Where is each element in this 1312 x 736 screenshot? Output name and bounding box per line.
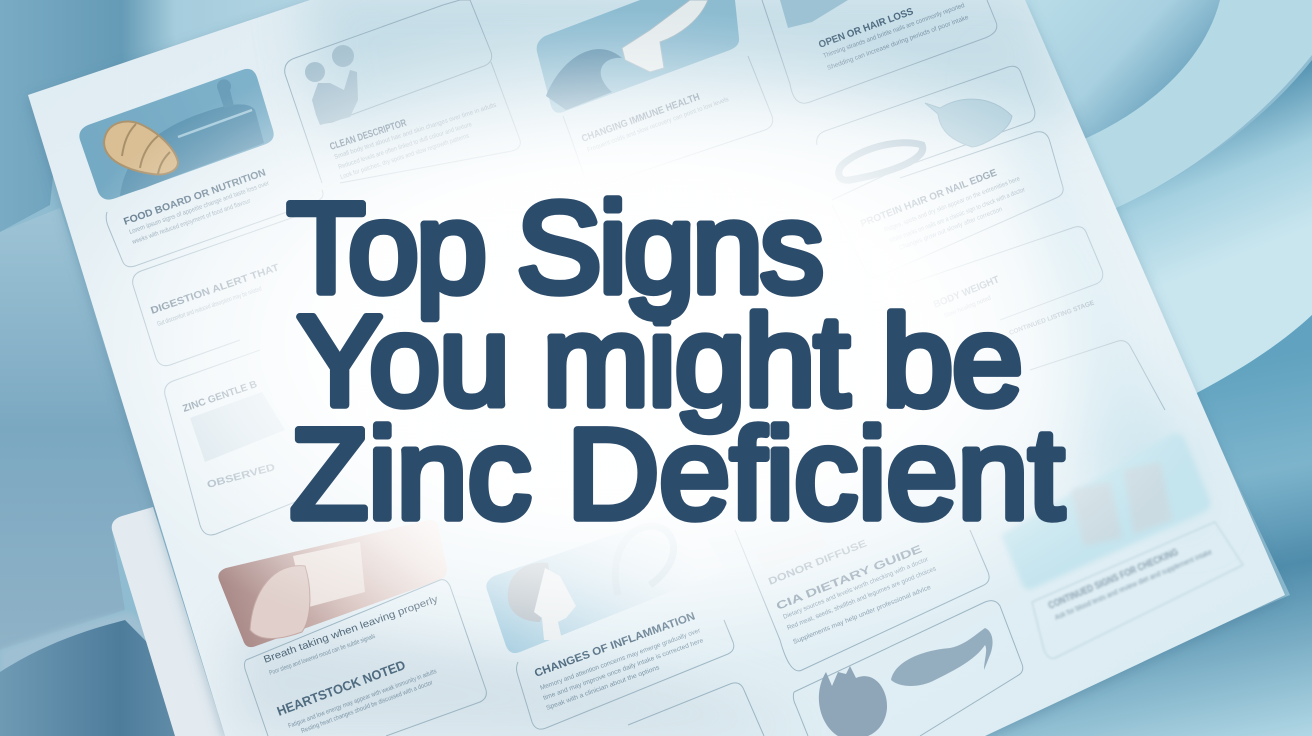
card outline 5 <box>817 66 1035 200</box>
icon: bread <box>104 121 178 174</box>
title line 1: Top Signs <box>287 177 824 320</box>
card below 7 <box>1030 341 1165 410</box>
icon: pillow <box>293 542 365 608</box>
body 10b: Resting heart changes should be discussed with a doctor <box>300 679 434 735</box>
heading 9: CONTINUED SIGNS FOR CHECKING <box>1047 547 1180 612</box>
panel: sign 11 <box>486 508 764 736</box>
card outline 8 <box>165 350 300 535</box>
card 5 lower <box>832 132 1063 277</box>
card outline 4 <box>762 0 997 103</box>
heading 3: CHANGING IMMUNE HEALTH <box>580 92 701 145</box>
person icon <box>305 45 358 125</box>
body 5a: Ridges, spots and dry skin appear on the extremities here <box>883 175 1021 234</box>
body 6: Gut discomfort and reduced absorption may be related <box>156 285 263 328</box>
image 4 <box>780 0 848 28</box>
heading 7: BODY WEIGHT <box>932 274 1001 311</box>
image 9 <box>1001 433 1210 589</box>
image 1 table <box>178 110 252 137</box>
body 1a: Lorem ipsum signs of appetite change and taste loss over <box>128 180 271 236</box>
card outline 11 <box>516 620 734 729</box>
icon: bag <box>925 99 1012 147</box>
back sheet <box>112 507 225 736</box>
card outline 9 <box>1032 522 1243 658</box>
body 1b: weeks with reduced enjoyment of food and flavour <box>131 197 252 246</box>
title <box>287 177 1064 546</box>
image 10 <box>218 520 447 647</box>
card outline 7 <box>905 227 1103 320</box>
heading 1: FOOD BOARD OR NUTRITION <box>122 167 267 228</box>
icon: stethoscope <box>615 526 674 595</box>
panel: sign 9 <box>1001 433 1243 658</box>
image 3 <box>537 0 739 113</box>
subheading 8: OBSERVED <box>206 462 276 491</box>
panel: sign 10 <box>218 520 486 736</box>
panel: sign 3 <box>537 0 773 187</box>
card outline 2 <box>285 0 492 124</box>
body 2b: Reduced levels are often linked to dull colour and texture <box>337 121 473 171</box>
body 11a: Memory and attention concerns may emerge gradually over <box>539 627 702 692</box>
body 10a: Fatigue and low energy may appear with weak immunity in adults <box>287 668 438 730</box>
body 9: Ask for blood tests and review diet and supplement intake <box>1054 549 1213 622</box>
body 2a: Small body text about hair and skin changes over time in adults <box>333 101 498 161</box>
panel: sign 5 <box>817 66 1063 277</box>
icon: apple <box>819 666 887 736</box>
heading 2: CLEAN DESCRIPTOR <box>329 117 409 153</box>
body 2c: Look for patches, dry spots and slow regrowth patterns <box>339 132 471 181</box>
image 8 <box>190 392 285 462</box>
panel: sign 7 <box>905 227 1165 410</box>
title line 3: Zinc Deficient <box>290 403 1064 546</box>
body 5b: White marks on nails are a classic sign to check with a doctor <box>888 186 1027 245</box>
panel: sign 2 <box>285 0 520 183</box>
card outline 12 <box>735 530 989 671</box>
panel: sign 4 <box>762 0 997 103</box>
heading 5: PROTEIN HAIR OR NAIL EDGE <box>859 167 999 230</box>
card lower 12 <box>793 601 1023 736</box>
heading 11: CHANGES OF INFLAMMATION <box>533 610 697 680</box>
central glow <box>100 24 1166 660</box>
body 5c: Changes grow out slowly after correction <box>898 206 1004 252</box>
body 3: Frequent colds and slow recovery can point to low levels <box>586 96 730 154</box>
panel: sign 8 <box>165 350 300 535</box>
icon: clip <box>839 143 923 180</box>
body 12a: Dietary sources and levels worth checking with a doctor <box>782 556 930 621</box>
title line 2: You might be <box>297 290 1023 433</box>
heading 10: Breath taking when leaving properly <box>262 594 439 666</box>
heading 6: DIGESTION ALERT THAT <box>149 262 281 317</box>
body 11c: Speak with a clinician about the options <box>545 664 661 712</box>
body 7: Slow healing noted <box>943 295 992 320</box>
card 2 lower <box>285 62 520 183</box>
card below 11 <box>628 683 764 736</box>
panel: sign 1 <box>79 69 323 267</box>
heading 8: ZINC GENTLE B <box>181 379 259 415</box>
card outline 10 <box>244 580 486 736</box>
subheading 12: CIA DIETARY GUIDE <box>775 543 924 613</box>
card outline 3 <box>563 56 773 187</box>
icon: profile hair <box>508 563 552 622</box>
image 1 figure <box>217 79 234 108</box>
panel: sign 6 <box>133 215 300 366</box>
card outline 1 <box>106 190 323 267</box>
image 11 <box>486 508 725 653</box>
panel: sign 12 <box>735 530 1023 736</box>
icon: wave <box>546 49 622 110</box>
body 12b: Red meat, seeds, shellfish and legumes are good choices <box>786 565 938 632</box>
icon: hand <box>622 0 708 72</box>
body 11b: time and may improve once daily intake is corrected here <box>542 637 705 702</box>
sheet tint <box>230 0 1200 736</box>
image 9 shapes <box>1071 462 1172 546</box>
card outline 6 <box>133 215 300 366</box>
icon: profile face <box>534 568 576 640</box>
body 12c: Supplements may help under professional advice <box>792 584 932 646</box>
icon: sleeping head <box>250 566 310 638</box>
image 1 dome <box>120 104 264 196</box>
body 4b: Shedding can increase during periods of poor intake <box>826 14 970 72</box>
heading 10b: HEARTSTOCK NOTED <box>275 657 407 719</box>
subheading 10: Poor sleep and lowered mood can be subtle signals <box>268 633 377 677</box>
image 1 <box>79 69 274 200</box>
image 12 <box>755 530 826 570</box>
heading 4: OPEN OR HAIR LOSS <box>817 6 915 51</box>
heading 12: DONOR DIFFUSE <box>767 538 869 588</box>
text below 7: CONTINUED LISTING STAGE <box>1008 299 1096 337</box>
icon: fish shape <box>891 628 993 686</box>
